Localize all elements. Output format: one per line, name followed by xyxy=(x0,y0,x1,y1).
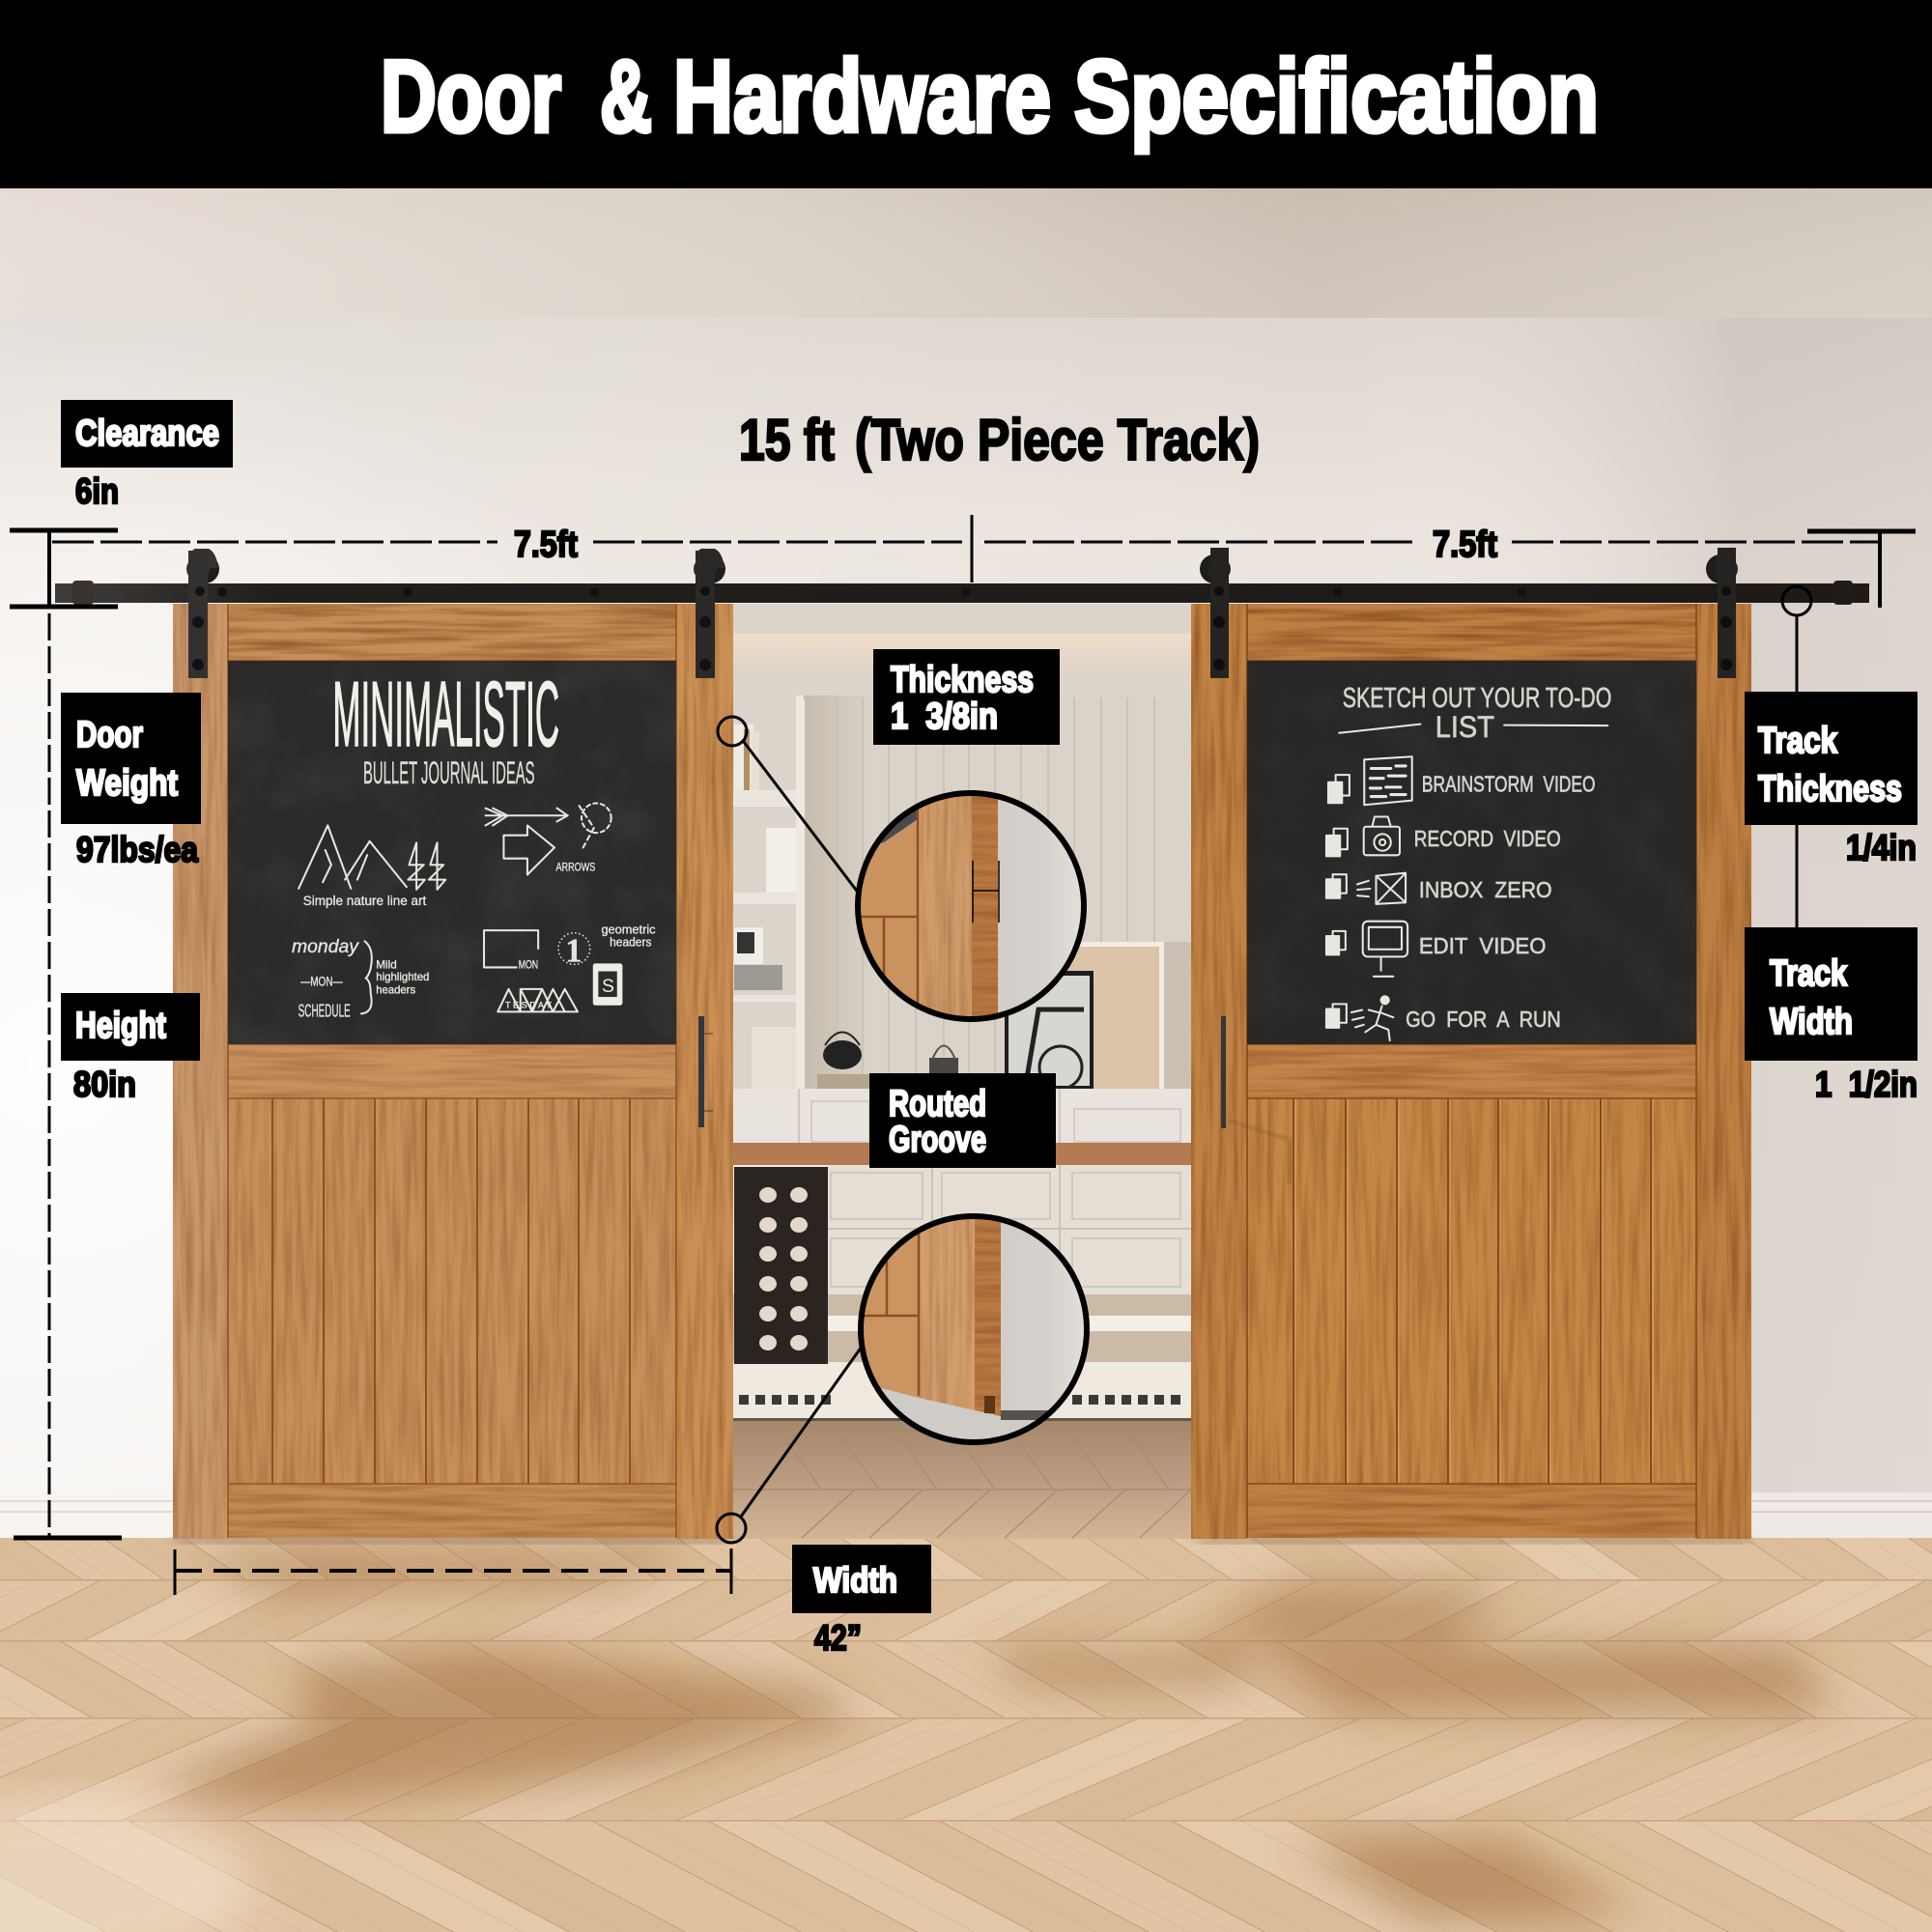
chalk art left: BULLET JOURNAL IDEAS xyxy=(363,754,535,790)
label: routed groove xyxy=(869,1073,1056,1168)
chalk art left xyxy=(292,663,656,1020)
label: width xyxy=(792,1545,931,1613)
callout leader: thickness xyxy=(718,717,859,894)
chalk icon: monitor xyxy=(1363,922,1407,977)
chalk caption: nature: Simple nature line art xyxy=(303,894,426,908)
value: 6in: 6in xyxy=(75,471,119,511)
chalk caption: mon: —MON— xyxy=(300,974,343,988)
chalk mountains xyxy=(298,825,445,890)
chalk caption: mild highlighted headers xyxy=(376,958,429,996)
callout leader: routed groove xyxy=(717,1347,862,1543)
wall xyxy=(0,318,1932,1538)
chalk arrows xyxy=(486,804,611,875)
label: thickness xyxy=(873,649,1060,745)
value: track thickness: 1/4in xyxy=(1846,828,1917,867)
track length heading: (Two Piece Track) xyxy=(855,408,1260,472)
track stop: right xyxy=(1833,581,1853,605)
title: Hardware xyxy=(673,40,1051,154)
bottom rail xyxy=(228,1484,676,1538)
hallway floor xyxy=(733,1421,1191,1539)
label: width: Width xyxy=(813,1560,897,1600)
chalk task: run: GO FOR A RUN xyxy=(1406,1007,1561,1032)
chalk caption: arrows: ARROWS xyxy=(556,860,595,873)
thickness marks xyxy=(973,861,999,923)
chalk heading: list: LIST xyxy=(1435,709,1494,744)
herringbone floor xyxy=(0,1538,1932,1932)
title: Specification xyxy=(1074,40,1599,154)
chalk caption: mild highlighted headers: highlighted xyxy=(376,971,429,983)
perforated black panel xyxy=(734,1167,828,1364)
upper cabinets xyxy=(733,1089,1191,1143)
right stile xyxy=(1696,604,1751,1539)
door: left xyxy=(173,604,733,1544)
interior beadboard wall xyxy=(804,696,1191,1092)
chalk caption: mild highlighted headers: headers xyxy=(376,983,415,996)
chalk art right xyxy=(1326,683,1611,1040)
tea pots xyxy=(817,1032,958,1090)
chalk header box xyxy=(484,930,538,967)
chalk bunting xyxy=(497,989,578,1011)
label: door weight: Weight xyxy=(76,763,178,804)
chalk icon: brainstorm board xyxy=(1364,756,1412,805)
label: track thickness: Track xyxy=(1758,721,1838,761)
chalk art left: MINIMALISTIC xyxy=(332,663,559,766)
lower cabinets xyxy=(828,1165,1191,1294)
hanger 2 xyxy=(694,549,725,678)
title: & xyxy=(600,40,652,154)
hanger 1 xyxy=(186,549,219,678)
rug xyxy=(733,1362,1191,1421)
chalkboard: right xyxy=(1247,661,1696,1044)
floor shadows and light xyxy=(0,1550,1835,1932)
label: height xyxy=(61,993,200,1061)
baseboards xyxy=(0,1492,1932,1538)
label: track width xyxy=(1745,927,1918,1061)
chalk task: inbox: INBOX ZERO xyxy=(1419,877,1552,902)
chalk task: record: RECORD VIDEO xyxy=(1414,826,1561,851)
chalk icon: camera xyxy=(1364,817,1400,855)
door handle: left xyxy=(698,1016,713,1127)
label: thickness: Thickness xyxy=(891,660,1034,700)
label: clearance: Clearance xyxy=(75,413,219,454)
chalk S tile xyxy=(593,963,622,1006)
ceiling xyxy=(0,188,1932,319)
dimension: door width xyxy=(175,1548,731,1595)
door handle: right xyxy=(1221,1016,1290,1183)
chalk heading: to-do: SKETCH OUT YOUR TO-DO xyxy=(1343,683,1611,714)
door shadow xyxy=(176,1536,731,1544)
dimension: 7.5ft span lines xyxy=(52,515,1879,582)
chalk caption: monday: monday xyxy=(292,936,359,957)
title banner xyxy=(0,0,1932,188)
value: door weight: 97lbs/ea xyxy=(76,830,198,869)
chalk number circle xyxy=(558,931,590,969)
value: width: 42” xyxy=(814,1618,862,1658)
value: height: 80in xyxy=(73,1065,136,1104)
chalk task: edit: EDIT VIDEO xyxy=(1419,933,1547,958)
plank panel xyxy=(228,1098,676,1484)
chalk underline strokes xyxy=(1339,724,1607,733)
label: track width: Track xyxy=(1770,953,1848,994)
label: track thickness xyxy=(1745,692,1918,825)
chalk checkboxes xyxy=(1326,775,1350,1028)
label: track width: Width xyxy=(1770,1002,1853,1042)
label: height: Height xyxy=(75,1006,166,1046)
chalk icon: runner xyxy=(1351,996,1393,1040)
label: 7.5ft right: 7.5ft xyxy=(1433,525,1497,565)
dimension: height dashed line xyxy=(14,613,122,1538)
top rail xyxy=(228,604,676,661)
middle rail xyxy=(1247,1044,1696,1098)
top rail xyxy=(1247,604,1696,661)
chalk task: brainstorm: BRAINSTORM VIDEO xyxy=(1422,771,1596,796)
desktop xyxy=(733,1143,1191,1165)
chalk bunting: T E S D A Y xyxy=(505,1000,552,1009)
track stop: left xyxy=(72,581,94,605)
chalk icon: inbox envelope xyxy=(1357,873,1406,904)
chalk number circle: 1 xyxy=(565,931,582,969)
bottom rail xyxy=(1247,1484,1696,1538)
chalk caption: schedule: SCHEDULE xyxy=(298,1000,351,1020)
plank panel xyxy=(1247,1098,1696,1484)
dimension: right end bracket xyxy=(1807,531,1916,608)
hanger 3 xyxy=(1200,548,1231,678)
label: routed groove: Routed xyxy=(889,1084,986,1124)
chalk caption: geometric headers: geometric xyxy=(601,923,656,937)
bookshelf xyxy=(733,696,805,1092)
interior soffit and glow xyxy=(733,604,1191,696)
label: door weight: Door xyxy=(76,715,143,755)
track length heading xyxy=(739,408,1260,472)
chalk caption: geometric headers: headers xyxy=(610,934,651,949)
magnifier: door thickness xyxy=(850,787,1092,1029)
title: Door xyxy=(381,40,561,154)
chalk caption: mon box: MON xyxy=(519,958,538,971)
label: 7.5ft left: 7.5ft xyxy=(514,525,578,565)
label: thickness: 1 3/8in xyxy=(891,696,998,737)
chalk caption: geometric headers xyxy=(601,923,656,949)
chalkboard: left xyxy=(228,661,676,1044)
label: routed groove: Groove xyxy=(889,1120,986,1160)
magnifier: routed groove xyxy=(855,1212,1096,1449)
door: right xyxy=(1191,604,1751,1544)
title xyxy=(381,40,1599,154)
middle rail xyxy=(228,1044,676,1098)
left stile xyxy=(173,604,228,1539)
track length heading: 15 ft xyxy=(739,408,835,472)
callout leader: track xyxy=(1782,586,1811,927)
leaning art and framed photo xyxy=(1005,942,1164,1090)
barn door track xyxy=(55,581,1869,605)
label: clearance xyxy=(61,400,233,468)
door shadow xyxy=(1198,1536,1748,1544)
hanger 4 xyxy=(1706,548,1738,678)
room floor behind desk xyxy=(733,1294,1191,1362)
dimension: clearance bracket xyxy=(10,530,118,607)
chalk S tile: S xyxy=(602,976,614,997)
chalk brace xyxy=(361,941,372,1013)
chalk caption: mild highlighted headers: Mild xyxy=(376,958,397,971)
door opening: interior room xyxy=(733,604,1191,1539)
left stile xyxy=(1191,604,1247,1539)
right stile xyxy=(676,604,733,1539)
label: door weight xyxy=(61,693,201,824)
